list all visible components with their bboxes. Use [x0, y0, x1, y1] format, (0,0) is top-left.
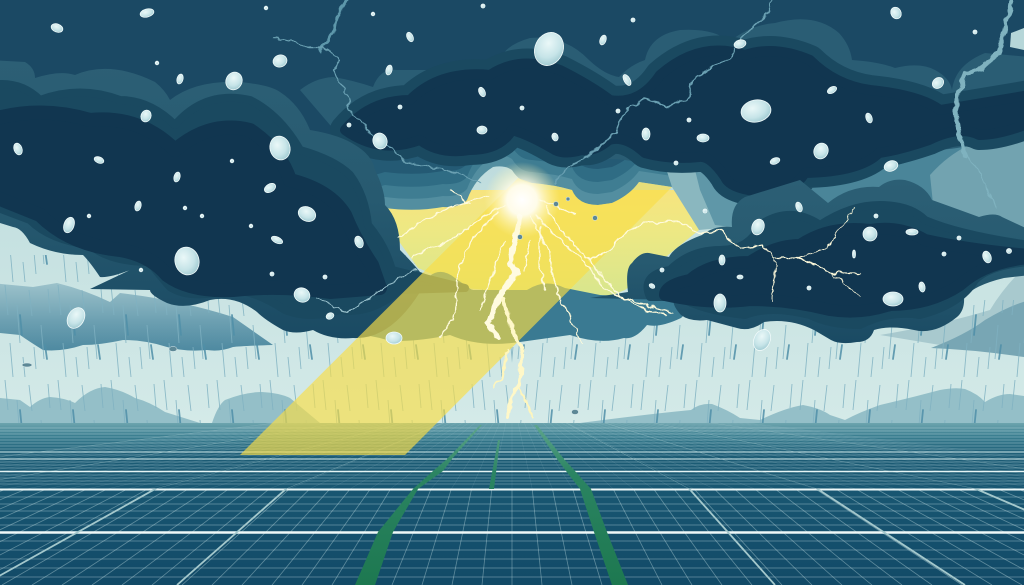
green strip: centre: [489, 440, 500, 489]
top centre cloud: outer layer: [300, 19, 1024, 196]
distant cloud: left: [0, 283, 273, 351]
left cloud middle layer: [0, 84, 465, 315]
right cloud outer layer: [590, 180, 1024, 343]
right cloud middle layer: [648, 205, 1024, 325]
hailstones: [12, 4, 1012, 414]
backdrop behind upper right clouds: [720, 134, 1024, 270]
top left bolt: [320, 0, 347, 50]
yellow glow behind lightning: [380, 190, 700, 300]
lower left bolt: [317, 270, 417, 313]
large hailstones: [12, 5, 946, 353]
left cloud outer layer: [0, 60, 465, 338]
dark storm cloud: right: [590, 180, 1024, 343]
far right bolt: [955, 0, 1012, 157]
panel cell lines: vertical near: [0, 490, 1024, 585]
top centre bolt: [555, 0, 772, 183]
cloud underside layers: [360, 104, 720, 215]
distant cloud: right, light: [880, 262, 1024, 345]
main bolt: [487, 217, 520, 337]
green strip: right: [534, 425, 628, 585]
upper cloud mass: [0, 0, 1024, 230]
teal break at right of glow: [660, 150, 760, 230]
small hailstones: [87, 4, 1011, 292]
sky background: [0, 0, 1024, 425]
rain streaks: right: [512, 300, 1024, 423]
mid-level blue cloud: [340, 272, 700, 344]
green strip: left: [355, 425, 482, 585]
panel column gaps: near: [0, 489, 1024, 585]
grey hail near the lightning: [22, 197, 598, 414]
yellow light beam: [240, 178, 672, 455]
panel cell lines: vertical far: [0, 423, 1024, 488]
panel row gaps: [0, 531, 1024, 534]
lightning core glow: [484, 162, 560, 238]
right cloud core: [665, 229, 1024, 312]
top centre cloud: middle layer: [345, 50, 1024, 192]
left cloud core: [0, 112, 380, 292]
top centre cloud: core: [345, 50, 1024, 192]
panel column gaps: far: [0, 423, 1024, 489]
distant mountains: [0, 387, 1024, 423]
rain streaks: left: [0, 255, 512, 423]
solar panel field: [0, 423, 1024, 585]
main lightning strike: [398, 190, 859, 417]
sky patch top right: [1010, 28, 1024, 50]
lightning branches: [398, 190, 859, 343]
distant cloud: right, dark: [931, 300, 1024, 358]
panel cell lines: horizontal: [0, 428, 1024, 577]
storm-cloud lightning: [273, 0, 1012, 313]
dark storm cloud: left: [0, 60, 465, 338]
